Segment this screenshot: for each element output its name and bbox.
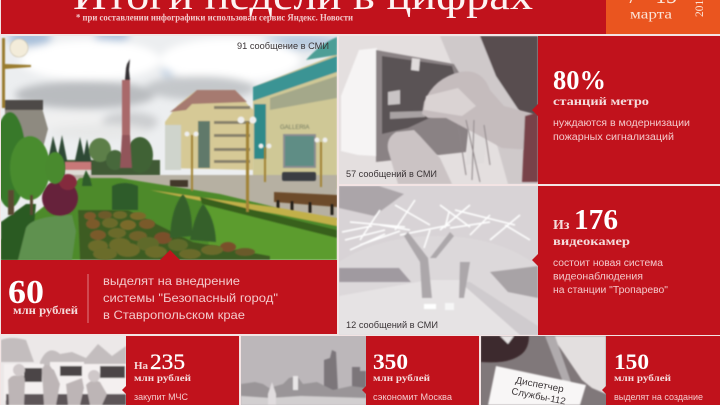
description: видеонаблюдения — [553, 270, 643, 282]
panel: 350 million stat — [362, 336, 479, 405]
skyline — [241, 350, 366, 405]
subhead: станций метро — [553, 94, 649, 108]
description: сэкономит Москва — [373, 392, 452, 402]
description: системы "Безопасный город" — [103, 291, 278, 305]
benches and car — [170, 172, 337, 215]
sign text — [512, 377, 566, 404]
header band — [1, 0, 606, 34]
figure: На — [134, 360, 149, 372]
figure: 80% — [553, 65, 606, 95]
description: закупит МЧС — [134, 392, 188, 402]
figure: 350 — [373, 349, 408, 374]
panel: 176 cameras stat: 176 — [574, 204, 618, 236]
description: выделят на внедрение — [103, 274, 240, 288]
monument — [120, 59, 132, 168]
panel: fire alarm photo — [339, 36, 538, 184]
panel: Stavropol photo — [0, 30, 340, 260]
unit: млн рублей — [134, 373, 192, 384]
unit: млн рублей — [614, 373, 672, 384]
date block — [606, 0, 720, 34]
topiary and shrubs — [1, 170, 216, 260]
panel: 235 million stat — [122, 336, 239, 405]
sky and clouds — [1, 36, 337, 222]
description — [553, 118, 690, 143]
panel: dispatcher sign photo — [481, 336, 606, 405]
unit: млн рублей — [13, 303, 78, 317]
sign text: Диспетчер — [514, 375, 565, 395]
station interior — [339, 186, 538, 335]
date block: марта — [630, 8, 673, 22]
alarm board — [341, 36, 538, 184]
plaza — [72, 175, 337, 220]
media count: 12 сообщений в СМИ — [346, 320, 438, 330]
media count: 91 сообщение в СМИ — [237, 41, 329, 51]
beige building — [165, 90, 254, 170]
distant trees — [48, 135, 160, 176]
media count: 57 сообщений в СМИ — [346, 169, 437, 179]
panel: Moscow skyline photo — [241, 336, 366, 405]
clipped balls — [84, 211, 255, 260]
panel: 176 cameras stat — [532, 186, 720, 335]
panel: 150 million stat — [602, 336, 720, 405]
lawn and flowerbeds — [1, 178, 337, 260]
description: выделят на создание — [614, 392, 703, 402]
left trees and lamp — [0, 38, 65, 215]
panel: 235 million stat: 235 — [150, 349, 185, 374]
lamps — [184, 116, 328, 212]
panel: emergency crew photo — [1, 336, 126, 405]
figure: 60 — [8, 274, 44, 311]
source note: * при составлении инфографики использован сервис Яндекс. Новости — [76, 12, 353, 24]
subhead: видеокамер — [553, 234, 630, 248]
unit: млн рублей — [373, 373, 431, 384]
panel: 60 million rubles — [1, 250, 337, 334]
shopping gallery — [253, 37, 337, 189]
panel: 80 percent stat — [532, 36, 720, 184]
description — [103, 274, 278, 322]
description: нуждаются в модернизации — [553, 118, 690, 129]
description — [553, 258, 668, 296]
panel: metro station photo — [339, 186, 538, 335]
description: в Ставропольском крае — [103, 308, 245, 322]
hands — [388, 71, 538, 184]
description: пожарных сигнализаций — [553, 132, 674, 143]
figure: Из — [553, 218, 570, 233]
description: на станции "Тропарево" — [553, 285, 668, 296]
description: состоит новая система — [553, 258, 663, 269]
figure: 150 — [614, 349, 649, 374]
shopping gallery: GALLERIA — [280, 125, 309, 131]
